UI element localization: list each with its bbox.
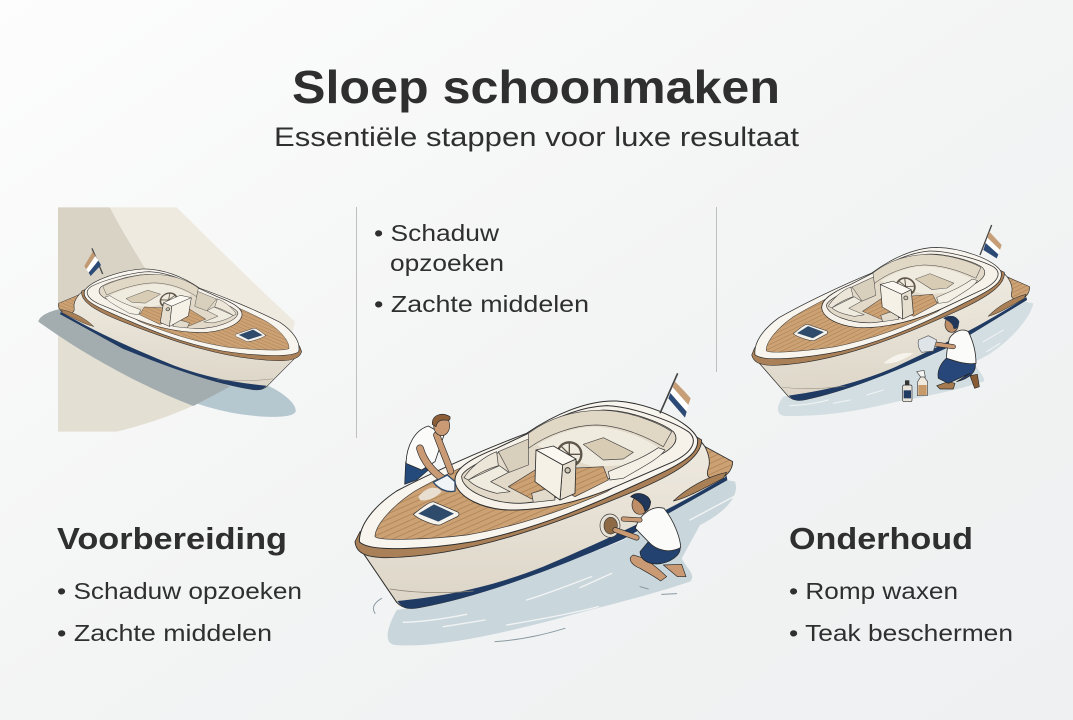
bullet: Zachte middelen: • Zachte middelen	[374, 291, 589, 317]
boat	[355, 401, 733, 608]
water highlights	[403, 495, 737, 627]
illustration: boat in shade (left)	[38, 207, 318, 432]
bullet: Teak beschermen: • Teak beschermen	[789, 620, 1013, 646]
boat	[739, 244, 1042, 402]
shade area light	[110, 207, 295, 367]
water	[778, 302, 1033, 416]
illustration: boat being cleaned (center)	[355, 373, 737, 645]
water highlights	[790, 330, 1003, 406]
person: polishing deck	[405, 414, 455, 492]
illustration: hull waxed on water (right)	[739, 225, 1042, 416]
bullet continuation: opzoeken	[390, 250, 504, 276]
title: Sloep schoonmaken	[292, 61, 780, 113]
wax sheen	[883, 353, 913, 363]
bullet: Schaduw opzoeken: • Schaduw opzoeken	[57, 578, 302, 604]
flag	[660, 373, 691, 418]
boat shadow over shade	[38, 309, 230, 406]
panel: Voorbereiding	[57, 521, 302, 646]
subtitle: Essentiële stappen voor luxe resultaat	[274, 122, 800, 152]
boat shadow on water	[38, 309, 296, 417]
bullet: Schaduw opzoeken: • Schaduw	[374, 220, 499, 246]
shade area dark	[58, 207, 163, 387]
flag	[980, 225, 1002, 258]
spray bottle	[917, 370, 928, 396]
bullet: Zachte middelen: • Zachte middelen	[57, 620, 272, 646]
heading: Onderhoud	[789, 521, 973, 556]
person: wiping hull	[918, 316, 979, 389]
bottle	[903, 380, 912, 402]
shade area lower	[58, 333, 197, 432]
person: waxing hull	[600, 494, 686, 581]
foam on deck	[418, 488, 442, 500]
heading: Voorbereiding	[57, 521, 287, 556]
flag	[84, 248, 103, 276]
boat	[42, 268, 318, 390]
water	[388, 480, 736, 645]
bullet: Romp waxen: • Romp waxen	[789, 578, 958, 604]
panel: Onderhoud	[789, 521, 1013, 646]
panel: middle list	[374, 220, 589, 317]
